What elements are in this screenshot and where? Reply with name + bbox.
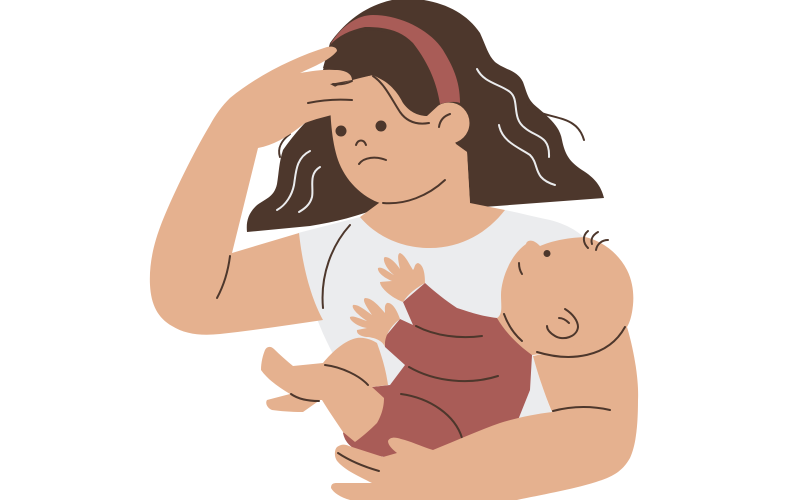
- white hair highlights: [277, 69, 555, 212]
- ear inner line: [439, 114, 450, 127]
- right eye: [376, 120, 386, 132]
- mother t-shirt: [298, 210, 600, 440]
- mouth: [359, 158, 386, 164]
- baby details: [291, 231, 608, 438]
- hair strand at left outline: [279, 134, 290, 157]
- shirt sleeve line: [323, 225, 350, 308]
- baby: [261, 231, 633, 457]
- headband: [330, 15, 460, 104]
- arm creases: [338, 327, 625, 471]
- knuckle line: [333, 81, 352, 84]
- nose: [356, 140, 366, 145]
- mother raised arm and hand: [150, 47, 360, 335]
- baby head and neck: [497, 237, 633, 355]
- elbow crease: [217, 256, 230, 298]
- baby eye: [544, 250, 550, 257]
- jaw line: [383, 180, 445, 203]
- baby upper hand: [378, 253, 425, 302]
- baby lower hand: [350, 298, 400, 347]
- hair strand over forehead: [373, 76, 429, 124]
- mother neck and collar: [360, 140, 505, 248]
- ear: [428, 102, 470, 144]
- hair fringe and headband: [277, 15, 584, 212]
- left eye: [336, 126, 346, 136]
- mother face: [330, 75, 470, 204]
- hair strand at right outline: [528, 105, 584, 140]
- mother holding arm and hand: [331, 327, 638, 500]
- forehead finger line: [308, 100, 352, 103]
- baby raised leg and foot: [261, 338, 388, 442]
- mother hair, back: [247, 0, 604, 232]
- baby body in red onesie: [343, 283, 532, 457]
